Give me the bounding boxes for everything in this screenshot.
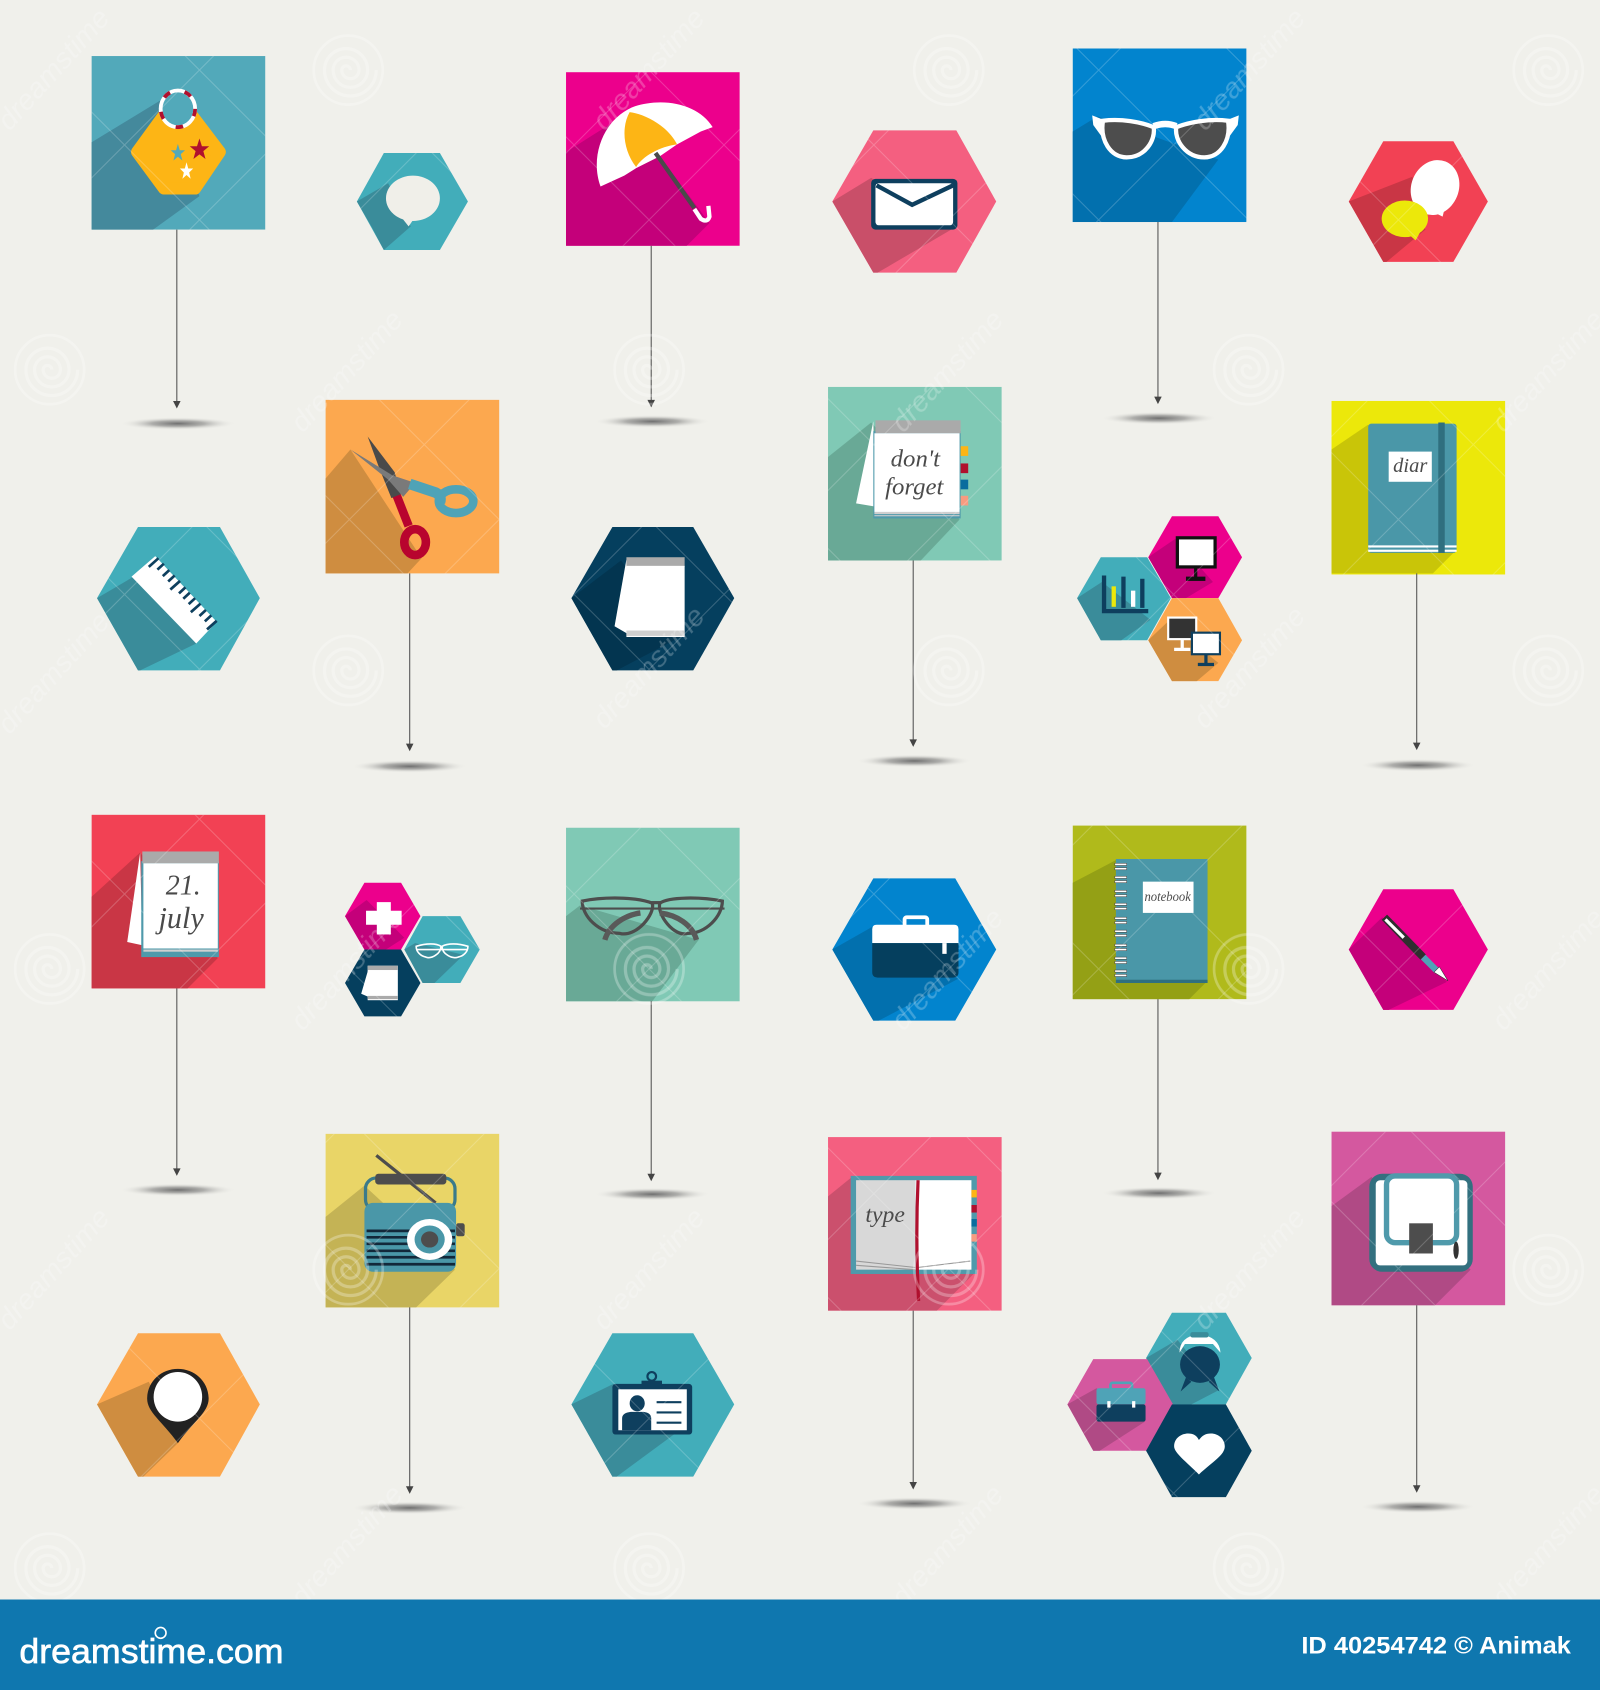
pin line: sunglasses xyxy=(1101,222,1217,425)
hexagon: map pin xyxy=(97,1333,260,1477)
watermark text: dreamstime xyxy=(586,600,712,735)
watermark text: dreamstime xyxy=(1187,600,1312,735)
icon: envelope xyxy=(871,179,957,230)
icon: sunglasses xyxy=(1092,115,1239,157)
hexagon cluster: medical xyxy=(345,883,480,1016)
pin line: calendar xyxy=(120,988,236,1196)
icon: notepad xyxy=(615,557,685,637)
icon: chat bubbles xyxy=(1382,153,1468,240)
hexagon: ruler xyxy=(97,527,260,670)
icon: planner xyxy=(1369,1174,1473,1272)
icon: two monitors xyxy=(1168,618,1220,666)
icon: small notepad xyxy=(361,966,398,1000)
icon: calendar pad xyxy=(127,851,219,957)
pin line: open book xyxy=(856,1311,973,1510)
watermark text: dreamstime xyxy=(284,304,410,438)
footer band xyxy=(0,1599,1600,1690)
tile: sunglasses xyxy=(1073,49,1246,222)
handwritten label: notebook xyxy=(1144,890,1192,905)
watermark text: dreamstime xyxy=(586,1202,712,1336)
pin line: planner xyxy=(1360,1305,1476,1513)
watermark text: dreamstime xyxy=(284,902,410,1037)
hexagon: chat bubbles xyxy=(1349,141,1488,262)
icon: diary xyxy=(1368,422,1457,553)
spiral binding xyxy=(1115,863,1127,976)
tile: don't forget notepad xyxy=(828,387,1002,560)
pin line: scissors xyxy=(351,573,468,773)
watermark text: dreamstime xyxy=(885,304,1010,438)
watermark text: dreamstime xyxy=(586,2,712,137)
hexagon: id badge xyxy=(571,1333,734,1477)
footer logo: dreamstime.com xyxy=(19,1633,284,1671)
icon: heart xyxy=(1174,1433,1225,1474)
icon: notepad with tabs xyxy=(856,420,968,518)
icon: bar chart xyxy=(1104,576,1148,611)
tile: bib xyxy=(92,56,265,230)
icon: speech bubble xyxy=(386,176,440,226)
tile: open book xyxy=(828,1137,1002,1311)
watermark text: dreamstime xyxy=(885,902,1010,1037)
tile: calendar xyxy=(92,815,265,988)
hexagon: briefcase xyxy=(832,878,996,1021)
icon: fountain pen xyxy=(1384,917,1448,981)
pin line: radio xyxy=(351,1307,468,1514)
icon: scissors xyxy=(350,437,473,555)
icon: glasses xyxy=(580,898,725,940)
icon: alarm clock xyxy=(1180,1332,1220,1391)
hexagon cluster: clock, case, heart xyxy=(1067,1313,1252,1497)
watermark text: dreamstime xyxy=(1187,2,1312,137)
icon: monitor xyxy=(1177,538,1215,581)
hexagon: pen xyxy=(1349,889,1488,1010)
icon: id badge xyxy=(612,1372,692,1435)
icon: glasses small xyxy=(416,944,468,958)
icon: umbrella xyxy=(597,102,713,221)
icon: notepad with tabs: forget xyxy=(885,474,945,501)
icon: radio xyxy=(364,1155,465,1272)
pin line: bib xyxy=(120,230,236,430)
hexagon cluster: computers xyxy=(1077,516,1242,681)
handwritten date: 21. xyxy=(166,871,201,902)
icon: briefcase xyxy=(872,917,958,978)
icon: bib xyxy=(137,91,220,189)
pin line: umbrella xyxy=(594,246,711,428)
pin line: reading glasses xyxy=(594,1001,711,1201)
tile: radio xyxy=(326,1134,499,1307)
icon: spiral notebook xyxy=(1115,859,1208,983)
image id and credit: ID 40254742 © Animak xyxy=(1301,1633,1572,1659)
hexagon: mail xyxy=(832,130,996,273)
icon: calendar pad: july xyxy=(155,901,204,935)
hexagon: notepad xyxy=(571,527,734,670)
icon: ruler xyxy=(132,556,217,643)
watermark text: dreamstime xyxy=(885,1479,1010,1613)
pin line: diary xyxy=(1360,573,1476,772)
watermark text: dreamstime xyxy=(1187,1202,1312,1336)
handwritten note: don't xyxy=(891,446,941,473)
tile: planner xyxy=(1332,1132,1505,1305)
handwritten word: type xyxy=(865,1202,905,1228)
icon: small briefcase xyxy=(1096,1383,1146,1422)
handwritten label: diar xyxy=(1393,455,1428,477)
watermark text: dreamstime xyxy=(284,1479,410,1613)
tile: spiral notebook xyxy=(1073,826,1246,999)
pin line: don't forget xyxy=(856,560,973,767)
icon: cross xyxy=(366,902,402,934)
icon: map pin xyxy=(147,1369,209,1443)
tile: umbrella xyxy=(566,72,740,246)
tile: reading glasses xyxy=(566,828,740,1001)
tile: scissors xyxy=(326,400,499,573)
hexagon: speech bubble xyxy=(357,153,468,250)
pin line: spiral notebook xyxy=(1101,999,1217,1200)
tile: diary xyxy=(1332,401,1505,574)
icon: open book xyxy=(851,1176,977,1301)
